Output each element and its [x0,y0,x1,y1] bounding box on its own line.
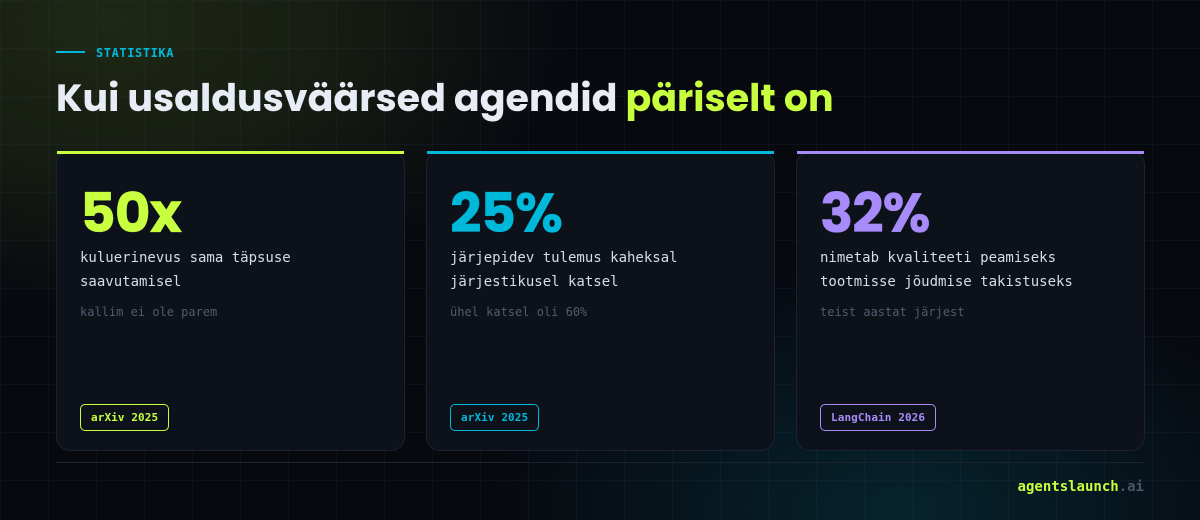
stat description [80,250,291,290]
footer brand: agentslaunch.ai [1018,478,1144,494]
stat value: 32% [820,175,930,252]
stat note: ühel katsel oli 60% [450,305,587,319]
eyebrow label: STATISTIKA [96,46,174,60]
source tag: arXiv 2025 [461,411,528,424]
stat description: nimetab kvaliteeti peamiseks [820,250,1056,266]
stat description: saavutamisel [80,274,181,290]
stat description [450,250,678,290]
stat note: teist aastat järjest [820,305,964,319]
panel: 25% [426,151,775,451]
stat description: tootmisse jõudmise takistuseks [820,274,1073,290]
source tag [450,404,539,431]
source tag [80,404,169,431]
top accent bar: lime [57,151,404,154]
stat description: kuluerinevus sama täpsuse [80,250,291,266]
accent line [56,51,85,53]
source tag: LangChain 2026 [831,411,925,424]
stat note: kallim ei ole parem [80,305,217,319]
stat value: 25% [450,175,562,252]
panel: 50x [56,151,405,451]
source tag [820,404,936,431]
stat description [820,250,1073,290]
panel: 32% [796,151,1145,451]
top accent bar: violet [797,151,1144,154]
stat value: 50x [80,175,181,252]
top accent bar: cyan [427,151,774,154]
stat description: järjestikusel katsel [450,274,619,290]
title: Kui usaldusväärsed agendid päriselt on [56,72,834,125]
source tag: arXiv 2025 [91,411,158,424]
stat description: järjepidev tulemus kaheksal [450,250,678,266]
